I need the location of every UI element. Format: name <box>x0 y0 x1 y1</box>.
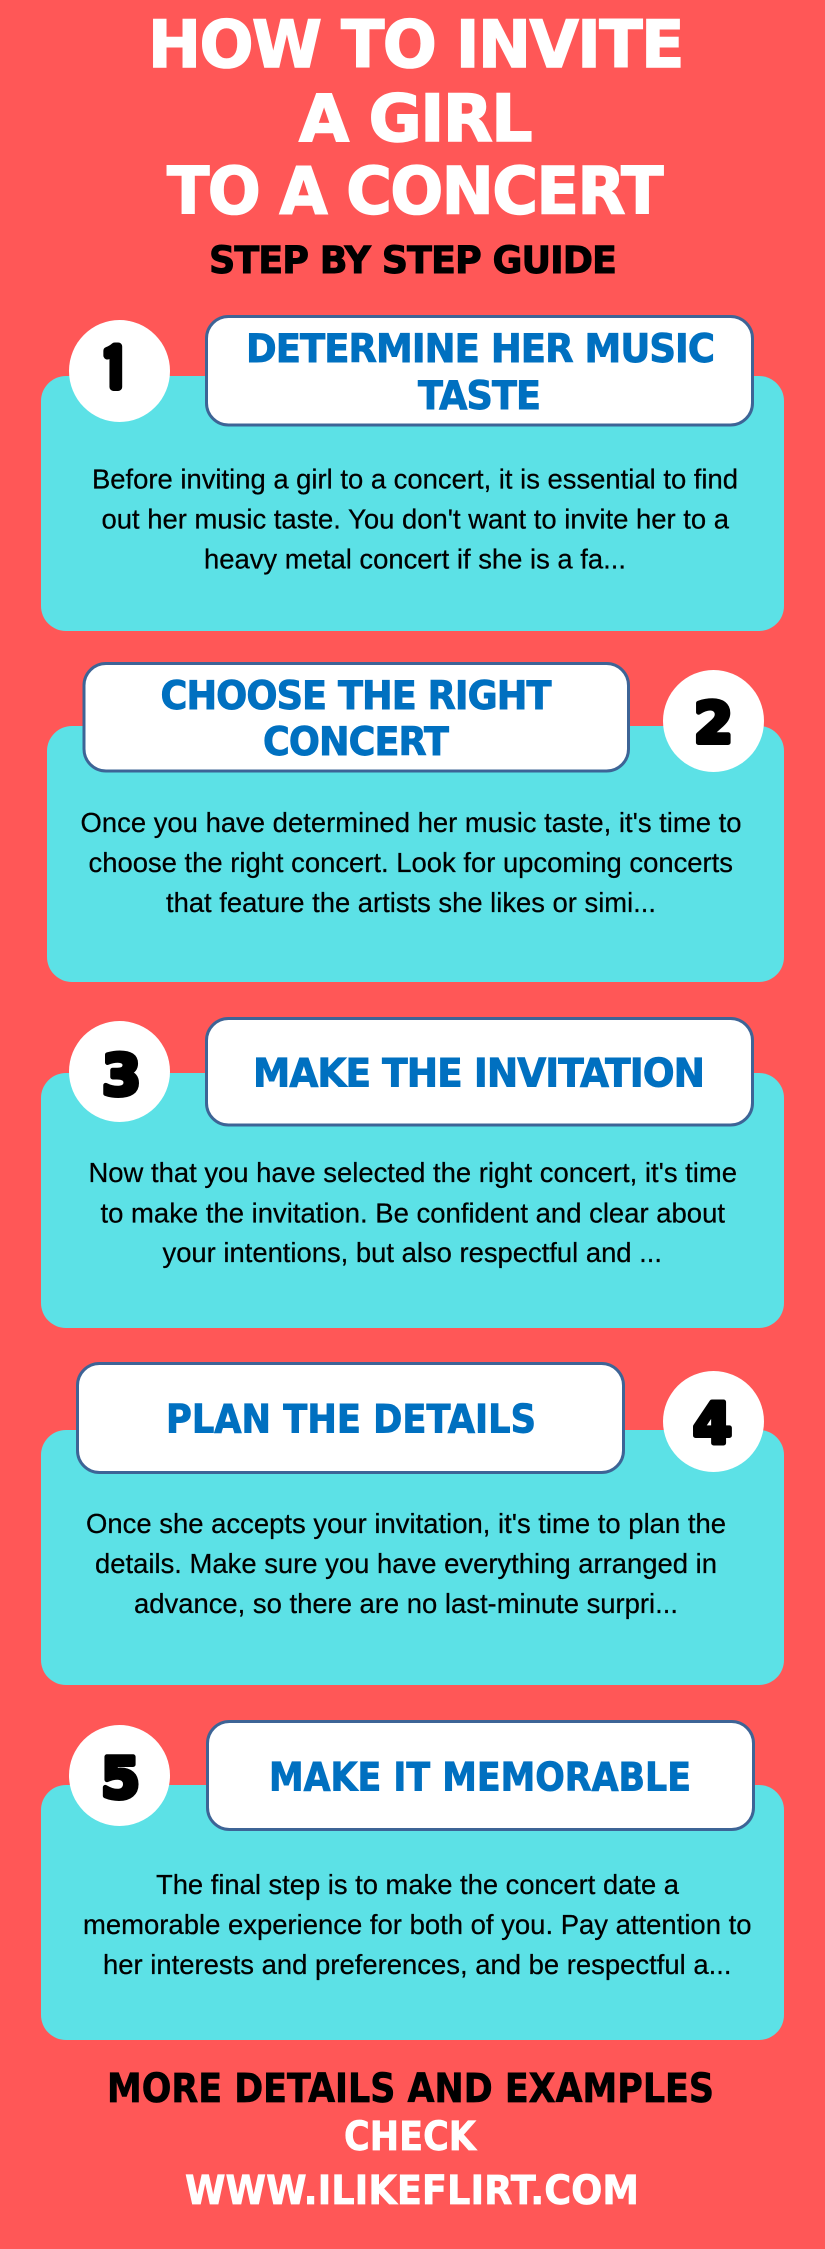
number badge 3: 3 <box>102 1044 141 1108</box>
panel background <box>41 1073 784 1328</box>
step 4 heading <box>78 1364 624 1472</box>
panel: step 4 <box>41 1364 784 1685</box>
panel: step 3 <box>41 1018 784 1328</box>
panel: step 5 <box>41 1722 784 2040</box>
number badge 4 <box>663 1371 764 1472</box>
step 4 text: Once she accepts your invitation, it's time to plan the <box>86 1508 726 1539</box>
step 1 text: Before inviting a girl to a concert, it is essential to find <box>92 464 738 494</box>
panel background <box>41 1430 784 1685</box>
number badge 2 <box>663 670 764 772</box>
step 4 text: advance, so there are no last-minute surpri... <box>134 1588 678 1619</box>
step 4 text <box>86 1508 726 1619</box>
step 2 text: Once you have determined her music taste, it's time to <box>80 807 742 838</box>
step 5 text: her interests and preferences, and be respectful a... <box>103 1949 732 1980</box>
footer check label: CHECK <box>344 2114 478 2160</box>
panel: step 2 <box>47 664 784 982</box>
title: A GIRL <box>299 82 531 157</box>
number badge 1 <box>69 320 170 422</box>
step 3 text: Now that you have selected the right concert, it's time <box>88 1157 737 1188</box>
panel background <box>47 726 784 982</box>
subtitle: STEP BY STEP GUIDE <box>209 239 616 282</box>
footer heading: MORE DETAILS AND EXAMPLES <box>107 2066 714 2112</box>
step 5 heading <box>208 1722 754 1830</box>
step 1 text: heavy metal concert if she is a fa... <box>204 544 626 574</box>
step 3 heading: MAKE THE INVITATION <box>253 1052 704 1096</box>
step 3 text: your intentions, but also respectful and ... <box>162 1237 662 1268</box>
number badge 3 <box>69 1021 170 1122</box>
step 2 text: choose the right concert. Look for upcoming concerts <box>88 847 733 878</box>
step 2 text <box>80 807 742 918</box>
title <box>148 8 683 230</box>
step 2 heading <box>84 664 628 771</box>
step 4 heading: PLAN THE DETAILS <box>166 1398 536 1442</box>
step 5 text: The final step is to make the concert date a <box>156 1869 679 1900</box>
step 2 heading: CONCERT <box>263 720 449 765</box>
step 1 heading: DETERMINE HER MUSIC <box>246 327 714 372</box>
title: HOW TO INVITE <box>148 8 683 83</box>
step 1 heading <box>206 316 752 425</box>
panel background <box>41 1785 784 2040</box>
footer call to action <box>107 2066 714 2214</box>
number badge 1: 1 <box>100 339 130 397</box>
step 4 text: details. Make sure you have everything arranged in <box>95 1548 717 1579</box>
number badge 5: 5 <box>101 1746 140 1812</box>
step 5 heading: MAKE IT MEMORABLE <box>269 1756 691 1800</box>
step 1 heading: TASTE <box>418 374 540 419</box>
title: TO A CONCERT <box>167 154 663 230</box>
panel background <box>41 376 784 631</box>
number badge 2: 2 <box>694 692 733 756</box>
step 5 text: memorable experience for both of you. Pay attention to <box>83 1909 752 1940</box>
step 5 text <box>83 1869 752 1980</box>
step 3 text <box>88 1157 737 1268</box>
step 1 text: out her music taste. You don't want to invite her to a <box>102 504 729 534</box>
number badge 4: 4 <box>693 1392 732 1457</box>
step 2 heading: CHOOSE THE RIGHT <box>160 674 552 719</box>
step 2 text: that feature the artists she likes or simi... <box>166 887 656 918</box>
number badge 5 <box>69 1725 170 1826</box>
step 3 heading <box>206 1018 752 1125</box>
step 1 text <box>92 464 738 574</box>
step 3 text: to make the invitation. Be confident and clear about <box>100 1198 725 1228</box>
footer website: WWW.ILIKEFLIRT.COM <box>185 2168 639 2214</box>
panel: step 1 <box>41 316 784 631</box>
